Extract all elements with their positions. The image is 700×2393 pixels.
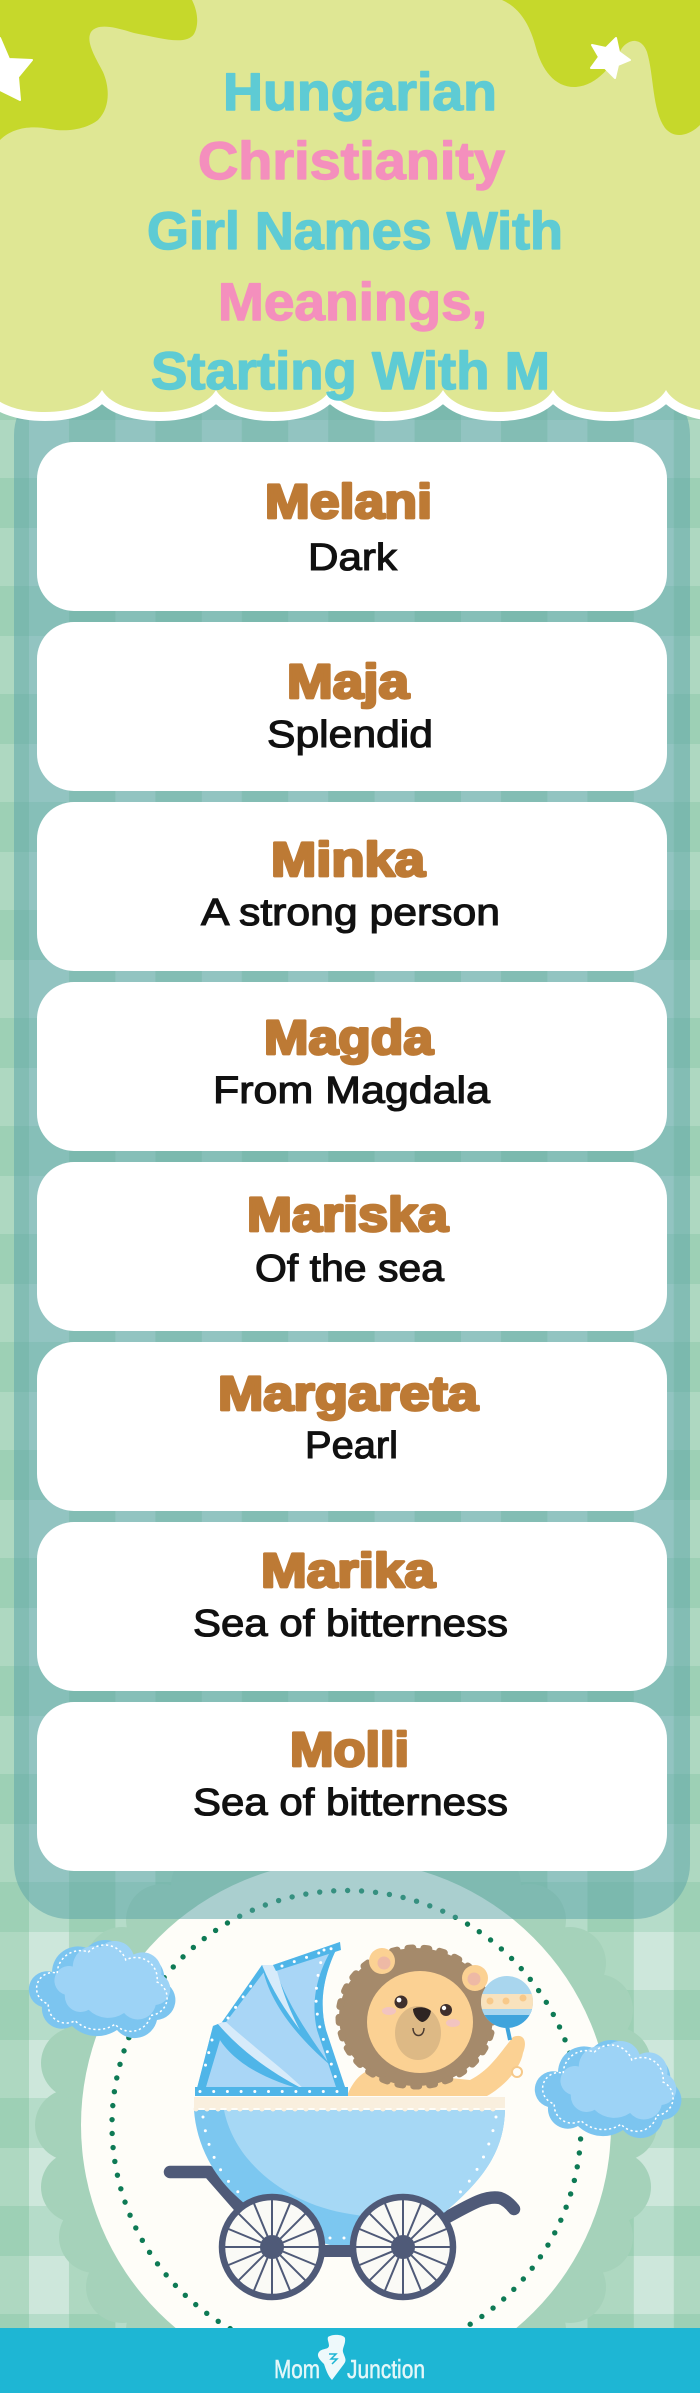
- card: Molli: Sea of bitterness: [193, 1782, 508, 1824]
- pram basket: [194, 2110, 505, 2245]
- header blob right: [502, 0, 700, 135]
- pram handles: [170, 2172, 514, 2220]
- dotted ring: [112, 1890, 581, 2360]
- card: Minka: Minka: [271, 834, 425, 887]
- right cloud: [535, 2040, 681, 2138]
- lion mane: [339, 1948, 493, 2086]
- star right: [591, 38, 630, 78]
- card: Margareta: [37, 1342, 667, 1511]
- card: Mariska: Of the sea: [255, 1248, 445, 1290]
- card: Minka: A strong person: [201, 892, 500, 934]
- card: Melani: Melani: [265, 476, 432, 529]
- header background with scalloped edge: [0, 0, 700, 412]
- card: Magda: [37, 982, 667, 1151]
- card: Marika: [37, 1522, 667, 1691]
- card: Mariska: Mariska: [247, 1189, 448, 1242]
- pram hood: [195, 1942, 348, 2096]
- header: [0, 0, 700, 412]
- card: Maja: [37, 622, 667, 791]
- title: [147, 63, 563, 401]
- left wheel: [222, 2197, 322, 2297]
- illustration: baby lion in a pram: [170, 1942, 534, 2297]
- header blob left: [0, 0, 197, 140]
- card: Molli: [37, 1702, 667, 1871]
- card: Mariska: [37, 1162, 667, 1331]
- title: Christianity: [198, 132, 506, 191]
- title: Starting With M: [151, 342, 550, 401]
- card: Minka: [37, 802, 667, 971]
- rattle: [480, 1975, 534, 2040]
- title: Meanings,: [218, 273, 487, 332]
- logo: MomJunction: Mom: [274, 2354, 320, 2384]
- left cloud: [29, 1940, 175, 2038]
- logo: MomJunction: Junction: [347, 2354, 425, 2384]
- title: Hungarian: [223, 63, 497, 122]
- pram axle: [320, 2245, 356, 2257]
- card: Margareta: Margareta: [218, 1368, 478, 1421]
- right wheel: [353, 2197, 453, 2297]
- card: Maja: Maja: [287, 656, 409, 709]
- card: Melani: [37, 442, 667, 611]
- pram trim: [194, 2097, 505, 2109]
- card: Melani: Dark: [308, 537, 398, 579]
- card: Maja: Splendid: [267, 714, 433, 756]
- footer bar: [0, 2328, 700, 2393]
- card: Magda: From Magdala: [213, 1070, 491, 1112]
- title: Girl Names With: [147, 202, 563, 261]
- logo: MomJunction: [274, 2335, 425, 2384]
- card: Molli: Molli: [290, 1724, 409, 1777]
- star left: [0, 38, 32, 100]
- cream circle: [81, 1871, 611, 2328]
- lion ears: [369, 1948, 488, 1991]
- card: Margareta: Pearl: [305, 1425, 398, 1467]
- lion body and raised arm: [347, 2036, 525, 2096]
- lion face: [367, 1971, 473, 2073]
- card: Marika: Sea of bitterness: [193, 1603, 508, 1645]
- card: Marika: Marika: [261, 1545, 435, 1598]
- lion ring: [512, 2067, 522, 2077]
- card: Magda: Magda: [264, 1012, 433, 1065]
- translucent teal panel: [14, 380, 690, 1919]
- scalloped green backdrop: [35, 1871, 656, 2328]
